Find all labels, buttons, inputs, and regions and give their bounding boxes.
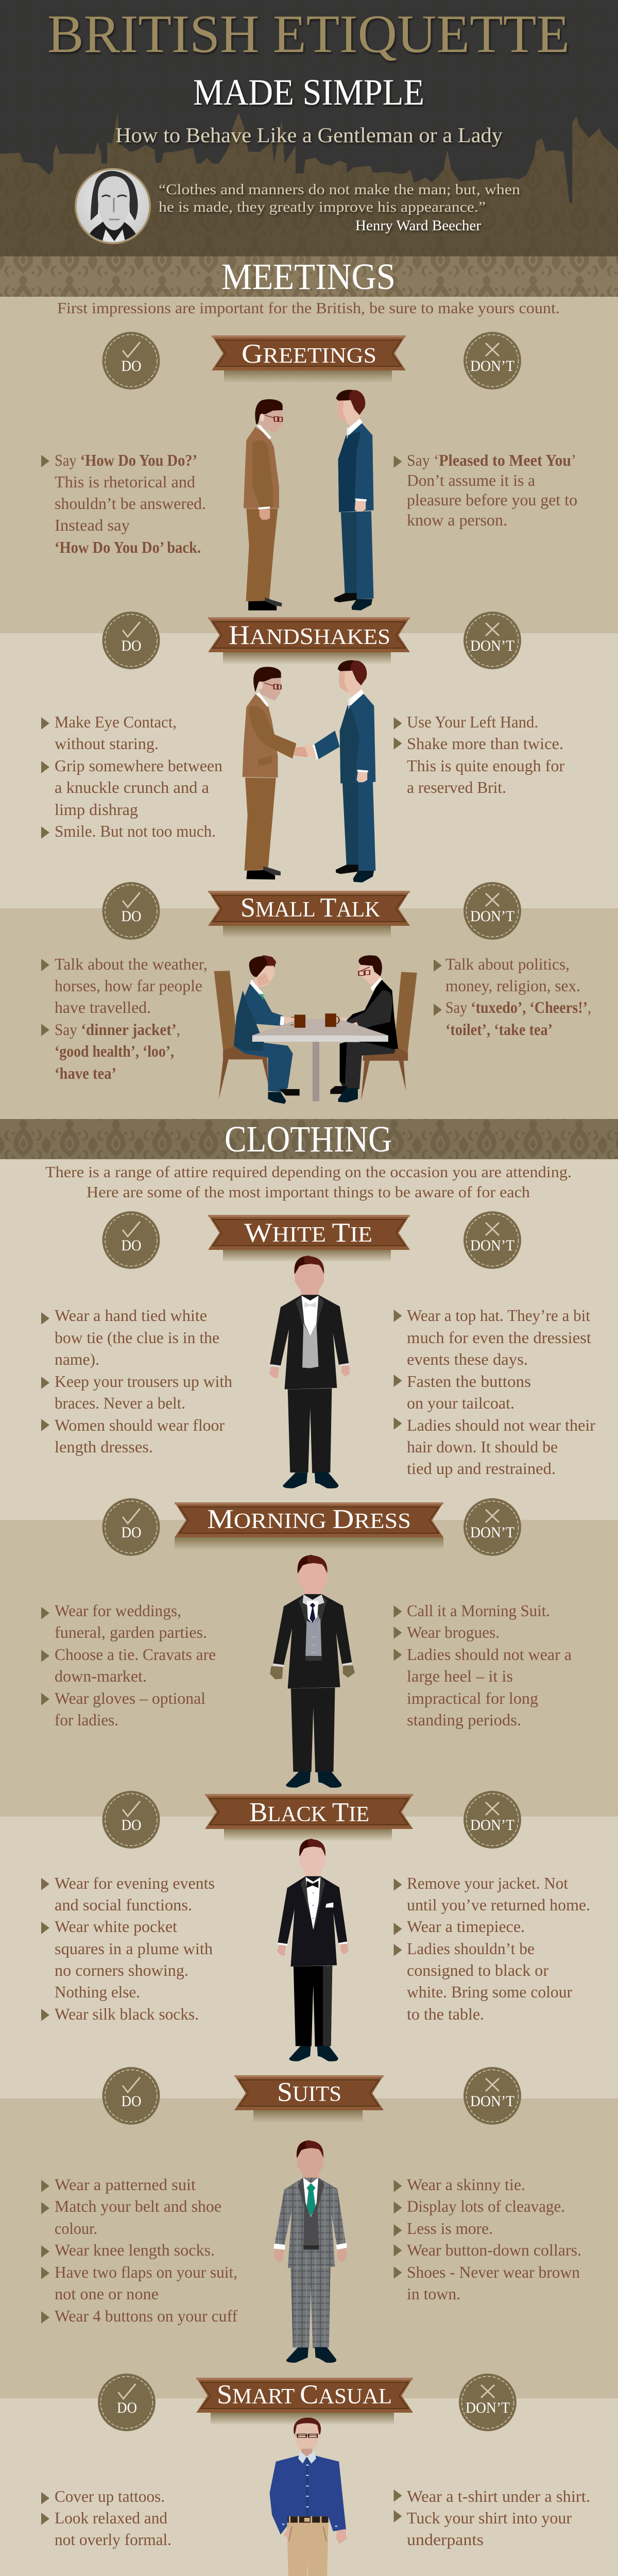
do list: Have two flaps on your suit, bbox=[55, 2263, 237, 2281]
dont list bbox=[393, 2487, 590, 2549]
dont list: underpants bbox=[407, 2530, 484, 2549]
panel: white tie bbox=[41, 1211, 595, 1488]
dont badge bbox=[464, 1211, 521, 1269]
panel: suits bbox=[41, 2067, 581, 2363]
illustration: man in smart casual bbox=[269, 2418, 347, 2576]
dont list: hair down. It should be bbox=[407, 1437, 558, 1456]
do badge: DO bbox=[122, 908, 141, 925]
panel: small talk bbox=[41, 882, 591, 1104]
do list bbox=[41, 1601, 216, 1729]
do list: Wear a patterned suit bbox=[55, 2175, 196, 2194]
do list: name). bbox=[55, 1350, 99, 1368]
dont list: pleasure before you get to bbox=[407, 490, 577, 509]
dont list: Remove your jacket. Not bbox=[407, 1874, 568, 1892]
panel: handshakes bbox=[41, 612, 564, 883]
illustration: two men greeting bbox=[244, 390, 374, 611]
dont list bbox=[393, 1874, 590, 2023]
dont list: Less is more. bbox=[407, 2219, 493, 2238]
dont list: Wear a skinny tie. bbox=[407, 2175, 525, 2194]
heading banner: white tie: WHITE TIE bbox=[244, 1218, 372, 1248]
do list: have travelled. bbox=[55, 998, 151, 1016]
dont list: Fasten the buttons bbox=[407, 1372, 531, 1391]
dont list bbox=[434, 955, 591, 1039]
do list: length dresses. bbox=[55, 1437, 153, 1456]
dont list: Ladies should not wear their bbox=[407, 1416, 595, 1434]
do list: Match your belt and shoe bbox=[55, 2197, 221, 2215]
dont badge bbox=[459, 2374, 517, 2431]
do list: Smile. But not too much. bbox=[55, 822, 216, 840]
dont list bbox=[393, 1306, 595, 1478]
do list: colour. bbox=[55, 2219, 97, 2238]
do badge bbox=[102, 1211, 160, 1269]
tea cups bbox=[295, 1015, 305, 1028]
do list bbox=[41, 955, 208, 1082]
do list: bow tie (the clue is in the bbox=[55, 1328, 219, 1347]
illustration: man in morning dress bbox=[270, 1555, 355, 1788]
panel: morning dress bbox=[41, 1498, 572, 1788]
do badge: DO bbox=[122, 1237, 141, 1254]
dont list bbox=[393, 713, 564, 796]
quote bbox=[159, 181, 521, 215]
intro: clothing bbox=[45, 1163, 572, 1201]
do list: Nothing else. bbox=[55, 1982, 140, 2001]
do badge bbox=[102, 612, 160, 669]
dont list: Tuck your shirt into your bbox=[407, 2509, 572, 2527]
title: BRITISH ETIQUETTE bbox=[47, 4, 570, 64]
dont list: standing periods. bbox=[407, 1710, 521, 1729]
do list: Talk about the weather, bbox=[55, 955, 208, 973]
dont list: a reserved Brit. bbox=[407, 778, 506, 796]
dont badge bbox=[464, 1791, 521, 1849]
do list: down-market. bbox=[55, 1667, 147, 1685]
heading banner: morning dress bbox=[175, 1502, 443, 1550]
heading banner: greetings: GREETINGS bbox=[242, 339, 376, 369]
heading banner: smart casual bbox=[196, 2378, 413, 2425]
dont badge: DON’T bbox=[470, 1817, 514, 1834]
do list: Wear 4 buttons on your cuff bbox=[55, 2307, 237, 2325]
dont list: white. Bring some colour bbox=[407, 1982, 572, 2001]
do list bbox=[41, 2175, 237, 2325]
dont badge bbox=[464, 1498, 521, 1556]
dont list: know a person. bbox=[407, 511, 507, 529]
dont list: Shake more than twice. bbox=[407, 734, 563, 753]
dont badge: DON’T bbox=[470, 2093, 514, 2110]
illustration: man in white tie bbox=[269, 1256, 350, 1488]
dont badge: DON’T bbox=[470, 1524, 514, 1541]
heading banner: greetings bbox=[212, 335, 406, 383]
dont badge bbox=[464, 882, 521, 940]
illustration: man in black tie bbox=[277, 1839, 348, 2061]
do badge bbox=[102, 1791, 160, 1849]
do list bbox=[41, 2487, 171, 2549]
do list: Wear for evening events bbox=[55, 1874, 215, 1892]
do list: ‘have tea’ bbox=[55, 1064, 116, 1082]
intro: clothing: There is a range of attire required depending on the occasion you are attending. bbox=[45, 1163, 572, 1181]
dont badge: DON’T bbox=[470, 908, 514, 925]
do list: Wear knee length socks. bbox=[55, 2241, 215, 2259]
do badge bbox=[102, 2067, 160, 2125]
panel: header bbox=[0, 0, 618, 257]
quote: “Clothes and manners do not make the man; but, when bbox=[159, 181, 521, 198]
do list: Wear white pocket bbox=[55, 1917, 177, 1936]
do list: and social functions. bbox=[55, 1895, 192, 1914]
do list: squares in a plume with bbox=[55, 1939, 213, 1958]
dont list: on your tailcoat. bbox=[407, 1394, 514, 1412]
dont list: Wear a t-shirt under a shirt. bbox=[407, 2487, 590, 2505]
do badge: DO bbox=[122, 1524, 141, 1541]
dont list: Display lots of cleavage. bbox=[407, 2197, 565, 2215]
heading banner: white tie bbox=[208, 1215, 410, 1262]
do list: Keep your trousers up with bbox=[55, 1372, 232, 1391]
do list: Wear gloves – optional bbox=[55, 1689, 205, 1707]
do list: not overly formal. bbox=[55, 2530, 171, 2549]
do list: braces. Never a belt. bbox=[55, 1394, 185, 1412]
do list: Cover up tattoos. bbox=[55, 2487, 165, 2505]
subtitle: made simple: MADE SIMPLE bbox=[193, 72, 424, 113]
heading banner: small talk: SMALL TALK bbox=[241, 893, 380, 923]
left man bbox=[249, 956, 275, 978]
dont list: Talk about politics, bbox=[445, 955, 570, 973]
panel: greetings bbox=[41, 332, 577, 611]
dont list: ‘toilet’, ‘take tea’ bbox=[445, 1020, 553, 1039]
dont list: Use Your Left Hand. bbox=[407, 713, 538, 731]
dont list: Wear a top hat. They’re a bit bbox=[407, 1306, 590, 1325]
do badge bbox=[102, 882, 160, 940]
intro: meetings: First impressions are important for the British, be sure to make yours count. bbox=[57, 299, 560, 317]
do list: not one or none bbox=[55, 2284, 159, 2303]
dont badge: DON’T bbox=[466, 2399, 510, 2416]
panel: smart casual bbox=[41, 2374, 590, 2576]
do list bbox=[41, 1874, 215, 2023]
do list: Wear for weddings, bbox=[55, 1601, 181, 1620]
do list: for ladies. bbox=[55, 1710, 118, 1729]
do list: without staring. bbox=[55, 734, 159, 753]
heading banner: handshakes bbox=[208, 617, 410, 665]
dont list: Shoes - Never wear brown bbox=[407, 2263, 580, 2281]
panel: black tie bbox=[41, 1791, 590, 2061]
do list: no corners showing. bbox=[55, 1961, 188, 1979]
do list: Grip somewhere between bbox=[55, 756, 222, 775]
dont list: much for even the dressiest bbox=[407, 1328, 591, 1347]
do list: Wear silk black socks. bbox=[55, 2005, 199, 2023]
do badge: DO bbox=[122, 2093, 141, 2110]
do list: Make Eye Contact, bbox=[55, 713, 177, 731]
dont badge bbox=[464, 332, 521, 389]
dont list: consigned to black or bbox=[407, 1961, 548, 1979]
dont list: in town. bbox=[407, 2284, 460, 2303]
dont badge bbox=[464, 2067, 521, 2125]
do badge bbox=[102, 1498, 160, 1556]
dont list: This is quite enough for bbox=[407, 756, 564, 775]
heading banner: morning dress: MORNING DRESS bbox=[207, 1504, 411, 1534]
dont badge: DON’T bbox=[470, 637, 514, 654]
dont list bbox=[393, 451, 577, 529]
do badge: DO bbox=[117, 2399, 137, 2416]
table bbox=[252, 1019, 388, 1036]
do badge: DO bbox=[122, 637, 141, 654]
section heading: clothing bbox=[0, 1118, 618, 1160]
dont list: tied up and restrained. bbox=[407, 1459, 556, 1478]
do list: Say ‘dinner jacket’, bbox=[55, 1020, 180, 1039]
dont list: events these days. bbox=[407, 1350, 528, 1368]
skyline of London bbox=[0, 112, 618, 257]
do badge bbox=[98, 2374, 156, 2431]
do list: ‘How Do You Do’ back. bbox=[55, 538, 201, 556]
dont list: impractical for long bbox=[407, 1689, 538, 1707]
dont list: Call it a Morning Suit. bbox=[407, 1601, 550, 1620]
do list: Look relaxed and bbox=[55, 2509, 167, 2527]
tagline: How to Behave Like a Gentleman or a Lady bbox=[115, 123, 503, 147]
dont badge: DON’T bbox=[470, 358, 514, 375]
do badge: DO bbox=[122, 1817, 141, 1834]
dont list: to the table. bbox=[407, 2005, 484, 2023]
illustration: two men at a table bbox=[214, 955, 417, 1104]
heading banner: suits: SUITS bbox=[277, 2077, 341, 2107]
quote attribution: Henry Ward Beecher bbox=[355, 218, 482, 234]
do list: Women should wear floor bbox=[55, 1416, 225, 1434]
dont list bbox=[393, 2175, 581, 2303]
do badge: DO bbox=[122, 358, 141, 375]
dont badge: DON’T bbox=[470, 1237, 514, 1254]
dont list: Say ‘Pleased to Meet You’ bbox=[407, 451, 576, 469]
section heading: meetings: MEETINGS bbox=[221, 256, 396, 297]
do list bbox=[41, 713, 222, 840]
section heading: meetings bbox=[0, 256, 618, 297]
do list: This is rhetorical and bbox=[55, 472, 195, 491]
heading banner: small talk bbox=[208, 891, 410, 938]
dont list: Wear button-down collars. bbox=[407, 2241, 581, 2259]
do list: Choose a tie. Cravats are bbox=[55, 1645, 216, 1664]
heading banner: smart casual: SMART CASUAL bbox=[217, 2380, 392, 2410]
right man bbox=[358, 955, 382, 976]
dont list: Say ‘tuxedo’, ‘Cheers!’, bbox=[445, 998, 591, 1016]
heading banner: suits bbox=[234, 2075, 384, 2123]
do list: Instead say bbox=[55, 516, 130, 534]
quote: he is made, they greatly improve his appearance.” bbox=[159, 199, 486, 215]
section heading: clothing: CLOTHING bbox=[225, 1118, 392, 1160]
dont list: Don’t assume it is a bbox=[407, 471, 535, 489]
do list bbox=[41, 451, 206, 556]
do list bbox=[41, 1306, 232, 1456]
do list: horses, how far people bbox=[55, 976, 202, 995]
do list: ‘good health’, ‘loo’, bbox=[55, 1042, 174, 1060]
dont list: Wear brogues. bbox=[407, 1623, 500, 1641]
heading banner: handshakes: HANDSHAKES bbox=[229, 620, 390, 650]
illustration: handshake bbox=[243, 660, 375, 883]
do badge bbox=[102, 332, 160, 389]
do list: funeral, garden parties. bbox=[55, 1623, 207, 1641]
do list: Say ‘How Do You Do?’ bbox=[55, 451, 197, 469]
clasped hands bbox=[294, 747, 313, 757]
illustration: man in patterned suit bbox=[273, 2140, 347, 2363]
dont list: large heel – it is bbox=[407, 1667, 513, 1685]
dont list: Wear a timepiece. bbox=[407, 1917, 525, 1936]
do list: shouldn’t be answered. bbox=[55, 494, 206, 513]
portrait: Henry Ward Beecher bbox=[75, 168, 151, 247]
heading banner: black tie bbox=[205, 1794, 413, 1841]
dont list: until you’ve returned home. bbox=[407, 1895, 590, 1914]
dont list bbox=[393, 1601, 572, 1729]
intro: clothing: Here are some of the most important things to be aware of for each bbox=[87, 1183, 530, 1201]
dont list: Ladies should not wear a bbox=[407, 1645, 572, 1664]
do list: limp dishrag bbox=[55, 800, 138, 819]
dont list: Ladies shouldn’t be bbox=[407, 1939, 535, 1958]
heading banner: black tie: BLACK TIE bbox=[249, 1798, 369, 1827]
dont badge bbox=[464, 612, 521, 669]
do list: a knuckle crunch and a bbox=[55, 778, 209, 796]
dont list: money, religion, sex. bbox=[445, 976, 580, 995]
do list: Wear a hand tied white bbox=[55, 1306, 207, 1325]
